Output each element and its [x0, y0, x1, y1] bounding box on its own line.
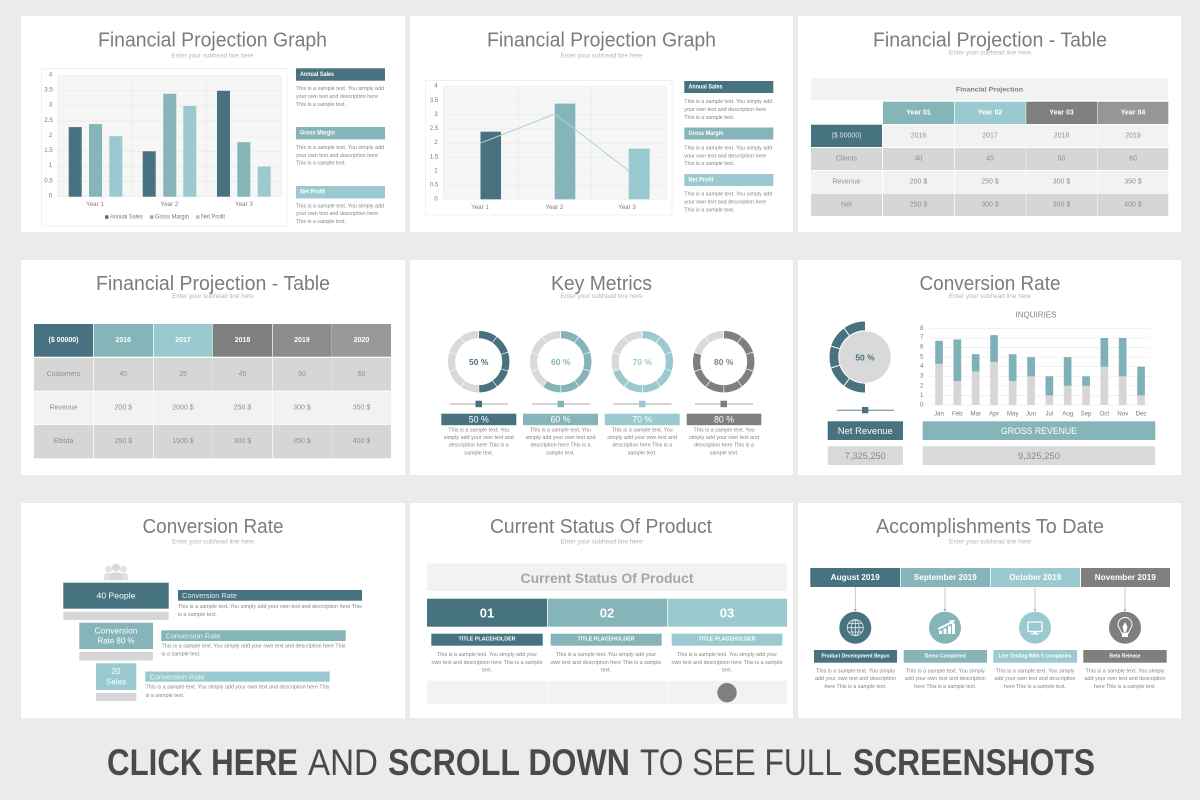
step column 03 with status marker: text. — [722, 668, 732, 674]
funnel tier: conversion rate 80 percent: Conversion — [94, 626, 138, 636]
inquiries stacked bar chart: 1 — [920, 392, 924, 399]
table: ($ 00000) — [832, 132, 861, 140]
inquiries stacked bar chart: May — [1007, 410, 1019, 418]
table: 45 — [239, 371, 246, 378]
funnel tier: 20 sales: Conversion Rate — [150, 672, 204, 682]
table: 45 — [986, 156, 994, 162]
net revenue — [828, 421, 903, 465]
call to action footer: CLICK HERE — [107, 742, 298, 783]
bar and line chart: 0 — [434, 196, 438, 202]
icon: growth chart — [938, 620, 955, 634]
table — [34, 324, 391, 458]
table: 2020 — [354, 337, 369, 344]
table: Year 01 — [906, 110, 931, 116]
net revenue: Net Revenue — [838, 426, 893, 436]
table: 350 $ — [1053, 202, 1070, 208]
title: Current Status Of Product — [490, 516, 712, 538]
step column 02: TITLE PLACEHOLDER — [578, 637, 634, 643]
sidebar notes: This is a sample text. — [684, 161, 734, 167]
funnel tier: 40 people: 40 People — [96, 591, 136, 601]
title: Key Metrics — [551, 273, 652, 295]
sidebar notes: Annual Sales — [300, 72, 335, 78]
icon: light bulb — [1118, 618, 1132, 637]
inquiries stacked bar chart: INQUIRIES — [1016, 310, 1056, 320]
sidebar notes: This is a sample text. You simply add — [296, 204, 384, 210]
table: 50 — [298, 371, 306, 378]
milestone: october 2019: add your own text and description — [994, 676, 1076, 682]
table: 2019 — [294, 337, 310, 344]
status banner — [427, 563, 787, 591]
bar and line chart: 2 — [434, 139, 438, 146]
step column 01: TITLE PLACEHOLDER — [458, 637, 516, 643]
sidebar notes: your own text and description here — [296, 211, 378, 217]
sidebar notes: This is a sample text. You simply add — [684, 99, 772, 105]
sidebar notes: Net Profit — [300, 190, 325, 196]
legend: Gross Margin — [155, 214, 190, 220]
sidebar notes: Net Profit — [688, 178, 714, 184]
subhead: Enter your subhead line here — [172, 294, 255, 300]
icon: people — [104, 564, 128, 580]
sidebar notes — [684, 81, 773, 214]
subhead: Enter your subhead line here — [560, 54, 643, 60]
bar and line chart: 1.5 — [430, 154, 439, 160]
table: Financial Projection — [956, 86, 1023, 94]
sidebar notes: your own text and description here — [684, 200, 766, 206]
step column 02: 02 — [600, 606, 614, 620]
net revenue: 7,325,250 — [845, 451, 886, 461]
funnel tier: 20 sales: 20 — [112, 667, 121, 676]
grouped bar chart: Year 3 — [235, 201, 253, 208]
bar and line chart — [426, 80, 672, 215]
icon: monitor — [1028, 622, 1042, 634]
inquiries stacked bar chart: 4 — [920, 363, 924, 370]
bar and line chart: 4 — [434, 82, 438, 90]
title: Accomplishments To Date — [876, 516, 1104, 538]
grouped bar chart: 2.5 — [44, 117, 53, 124]
inquiries stacked bar chart: Mar — [970, 410, 981, 418]
milestone: september 2019: This is a sample text. You simply — [906, 668, 985, 674]
table: 200 $ — [115, 404, 132, 412]
inquiries stacked bar chart: Jun — [1026, 410, 1037, 418]
metric: 50 percent: 50 % — [469, 357, 489, 367]
grouped bar chart: 2 — [49, 132, 53, 139]
table: 2018 — [1054, 132, 1069, 140]
grouped bar chart: 1.5 — [44, 147, 53, 154]
step column 03 with status marker: TITLE PLACEHOLDER — [698, 637, 756, 643]
title: Financial Projection Graph — [487, 30, 716, 52]
panel: financial projection table, four years — [798, 16, 1181, 232]
metric: 70 percent: simply add your own text and — [607, 435, 677, 441]
panel: current status of product — [410, 503, 793, 718]
milestone: october 2019: This is a sample text. You simply — [996, 668, 1075, 674]
metric: 60 percent: 60 % — [551, 357, 571, 367]
inquiries stacked bar chart: 0 — [920, 402, 924, 408]
table: 300 $ — [293, 404, 311, 412]
panel: financial projection table, five years — [21, 260, 405, 475]
title: Financial Projection - Table — [873, 30, 1107, 52]
milestone: october 2019: October 2019 — [1009, 573, 1062, 582]
table: 2018 — [235, 337, 250, 344]
step column 01: This is a sample text. You simply add your — [437, 652, 537, 658]
step column 01: text. — [482, 668, 492, 674]
milestone: august 2019: Product Development Begun — [822, 653, 890, 659]
milestone: october 2019 — [991, 568, 1080, 690]
table: 2019 — [1125, 132, 1141, 140]
funnel tier: 40 people: This is a sample text. You simply add your own text and description here This — [178, 604, 362, 610]
bar and line chart: Year 1 — [471, 204, 489, 211]
funnel tier: 40 people: is a sample text. — [178, 612, 217, 618]
step column 02: text. — [601, 668, 611, 674]
metric: 80 percent: simply add your own text and — [689, 435, 759, 441]
table: Revenue — [49, 404, 78, 412]
inquiries stacked bar chart: 5 — [920, 354, 924, 360]
funnel tier: 20 sales: Seles — [106, 678, 126, 686]
sidebar notes: Annual Sales — [688, 85, 723, 91]
funnel tier: conversion rate 80 percent: Conversion Rate — [166, 632, 220, 640]
metric: 60 percent: description here This is a — [530, 443, 590, 449]
sidebar notes — [296, 68, 385, 225]
subhead: Enter your subhead line here — [560, 540, 643, 546]
call to action footer: SCROLL DOWN — [388, 742, 630, 783]
metric: 80 percent: 80 % — [714, 414, 734, 424]
inquiries stacked bar chart: 3 — [920, 372, 924, 380]
panel: financial projection graph, three series — [21, 16, 405, 232]
sidebar notes: your own text and description here — [684, 107, 766, 113]
table: 300 $ — [981, 202, 999, 208]
table: 2016 — [911, 132, 926, 140]
funnel tier: conversion rate 80 percent: is a sample text. — [162, 652, 200, 658]
grouped bar chart: 1 — [49, 162, 53, 169]
call to action footer: AND — [308, 742, 378, 783]
metric: 70 percent: 70 % — [633, 357, 652, 367]
sidebar notes: This is a sample text. You simply add — [684, 192, 772, 198]
subhead: Enter your subhead line here — [560, 294, 643, 300]
table: 40 — [915, 156, 922, 162]
funnel tier: conversion rate 80 percent: This is a sample text. You simply add your own text and description here This — [162, 644, 346, 650]
sidebar notes: This is a sample text. — [684, 115, 734, 121]
table: 2016 — [116, 337, 131, 344]
sidebar notes: This is a sample text. — [684, 208, 734, 214]
inquiries stacked bar chart: 8 — [920, 325, 924, 332]
milestone: august 2019 — [810, 568, 900, 690]
bar and line chart: Year 2 — [546, 204, 564, 211]
table: Revenue — [832, 178, 861, 186]
metric: 50 percent: 50 % — [469, 414, 489, 424]
funnel tier: 40 people: Conversion Rate — [182, 591, 237, 600]
step column 01: own text and description here This is a sample — [432, 660, 542, 666]
bar and line chart: 2.5 — [430, 125, 439, 132]
metric: 70 percent: This is a sample text. You — [612, 427, 673, 433]
milestone: november 2019: November 2019 — [1095, 573, 1156, 582]
step column 02: This is a sample text. You simply add your — [556, 652, 656, 658]
sidebar notes: This is a sample text. — [296, 219, 346, 225]
inquiries stacked bar chart: 7 — [920, 334, 924, 341]
panel: key metrics — [410, 260, 793, 475]
funnel tier: conversion rate 80 percent — [79, 623, 346, 660]
table: 60 — [358, 371, 365, 378]
metric: 50 percent: description here This is a — [449, 443, 509, 449]
milestone: september 2019: here This is a sample text. — [914, 684, 976, 690]
subhead: Enter your subhead line here — [949, 540, 1032, 546]
milestone: august 2019: August 2019 — [831, 573, 880, 582]
step column 01: 01 — [480, 606, 494, 620]
title: Conversion Rate — [920, 273, 1060, 295]
milestone: october 2019: Live Testing With 5 companies — [998, 653, 1072, 659]
icon: globe — [847, 620, 863, 636]
table: Year 03 — [1049, 110, 1074, 116]
inquiries stacked bar chart: 2 — [920, 382, 924, 390]
gross revenue: 9,325,250 — [1018, 451, 1060, 461]
table: 2017 — [175, 337, 191, 344]
metric: 80 percent: sample text. — [710, 450, 738, 456]
inquiries stacked bar chart: Jan — [934, 410, 945, 418]
grouped bar chart — [42, 68, 287, 226]
panel: conversion rate funnel — [21, 503, 405, 718]
metric: 50 percent: simply add your own text and — [444, 435, 514, 441]
milestone: november 2019: add your own text and description — [1084, 676, 1166, 682]
metric: 60 percent: This is a sample text. You — [530, 427, 591, 433]
title: Conversion Rate — [142, 516, 284, 538]
inquiries stacked bar chart: Nov — [1117, 410, 1129, 418]
metric: 70 percent: 70 % — [632, 414, 652, 424]
grouped bar chart: 3 — [49, 102, 53, 108]
step column 03 with status marker: This is a sample text. You simply add your — [677, 652, 777, 658]
sidebar notes: This is a sample text. You simply add — [296, 145, 384, 151]
table: 1500 $ — [172, 438, 194, 445]
slider — [837, 407, 894, 413]
step column 03 with status marker: own text and description here This is a sample — [672, 660, 782, 666]
panel: accomplishments to date — [798, 503, 1181, 718]
grouped bar chart: 0 — [49, 192, 53, 200]
table: ($ 00000) — [49, 337, 78, 344]
funnel tier: conversion rate 80 percent: Rate 80 % — [98, 636, 134, 646]
inquiries stacked bar chart: Feb — [952, 410, 963, 418]
sidebar notes: This is a sample text. — [296, 160, 346, 166]
table: 250 $ — [115, 438, 132, 445]
milestone: september 2019: add your own text and description — [905, 676, 986, 682]
table: 50 — [1058, 156, 1065, 162]
table: 200 $ — [910, 178, 927, 186]
subhead: Enter your subhead line here — [949, 294, 1032, 300]
gross revenue — [923, 421, 1155, 465]
table: 300 $ — [1053, 178, 1070, 186]
subhead: Enter your subhead line here — [172, 54, 254, 60]
legend: Net Profit — [201, 214, 225, 220]
metric: 80 percent — [687, 335, 761, 456]
bar and line chart: 0.5 — [430, 182, 439, 188]
metric: 70 percent: description here This is a — [612, 443, 672, 449]
inquiries stacked bar chart — [920, 310, 1150, 418]
panel: conversion rate with inquiries chart — [798, 260, 1181, 475]
metric: 70 percent — [605, 335, 680, 456]
table: 25 — [179, 371, 187, 378]
call to action footer: SCREENSHOTS — [853, 742, 1095, 783]
table: 350 $ — [293, 438, 311, 445]
step column 02 — [548, 599, 667, 704]
half donut gauge: 50 % — [855, 352, 875, 362]
grouped bar chart: 3.5 — [44, 86, 53, 94]
gross revenue: GROSS REVENUE — [1001, 426, 1077, 436]
inquiries stacked bar chart: 6 — [920, 344, 924, 350]
sidebar notes: your own text and description here — [296, 94, 378, 100]
table: Year 04 — [1121, 110, 1145, 116]
table: Net — [841, 202, 852, 208]
inquiries stacked bar chart: Apr — [989, 410, 999, 418]
subhead: Enter your subhead line here — [172, 540, 255, 546]
grouped bar chart: 0.5 — [44, 178, 53, 184]
table: Clients — [836, 156, 858, 162]
sidebar notes: your own text and description here — [684, 154, 766, 160]
bar and line chart: 1 — [434, 168, 438, 174]
bar and line chart: 3 — [434, 111, 438, 118]
table — [811, 78, 1168, 216]
metric: 60 percent: simply add your own text and — [526, 435, 596, 441]
metric: 80 percent: This is a sample text. You — [694, 427, 754, 433]
milestone: september 2019: Demo Completed — [925, 653, 966, 659]
funnel tier: 20 sales: is a sample text. — [146, 693, 184, 699]
bar and line chart: Year 3 — [618, 204, 636, 211]
table: 40 — [119, 371, 127, 378]
metric: 70 percent: sample text. — [628, 450, 657, 456]
step column 01 — [427, 599, 547, 704]
step column 03 with status marker: 03 — [720, 606, 734, 620]
call to action footer: TO SEE FULL — [640, 742, 842, 783]
milestone: september 2019: September 2019 — [914, 573, 977, 582]
milestone: august 2019: This is a sample text. You simply — [816, 668, 895, 674]
subhead: Enter your subhead line here — [949, 50, 1032, 56]
table: 2000 $ — [172, 404, 194, 412]
milestone: september 2019 — [901, 568, 990, 690]
sidebar notes: Gross Margin — [688, 131, 724, 137]
table: 250 $ — [981, 178, 999, 186]
funnel tier: 40 people — [63, 583, 362, 620]
half donut gauge — [830, 326, 892, 388]
sidebar notes: This is a sample text. You simply add — [296, 86, 384, 92]
inquiries stacked bar chart: Sep — [1080, 410, 1092, 418]
table: 300 $ — [234, 438, 251, 445]
milestone: november 2019: here This is a sample text. — [1094, 684, 1156, 690]
inquiries stacked bar chart: Jul — [1045, 410, 1053, 418]
grouped bar chart: 4 — [49, 72, 53, 78]
table: 250 $ — [234, 404, 251, 412]
step column 02: own text and description here This is a sample — [550, 660, 662, 666]
title: Financial Projection Graph — [98, 30, 327, 52]
table: 350 $ — [353, 404, 370, 412]
panel: financial projection graph, bars and line — [410, 16, 793, 232]
metric: 60 percent: 60 % — [550, 414, 570, 424]
bar and line chart: 3.5 — [430, 97, 439, 104]
table: 60 — [1129, 156, 1137, 162]
title: Financial Projection - Table — [96, 273, 330, 295]
inquiries stacked bar chart: Aug — [1062, 410, 1074, 418]
sidebar notes: Gross Margin — [300, 131, 335, 137]
table: 400 $ — [353, 438, 370, 445]
table: 400 $ — [1124, 202, 1142, 208]
funnel tier: 20 sales — [96, 663, 330, 701]
sidebar notes: This is a sample text. You simply add — [684, 146, 772, 152]
status banner: Current Status Of Product — [520, 570, 694, 586]
milestone: october 2019: here This is a sample text. — [1004, 684, 1066, 690]
step column 03 with status marker — [668, 599, 787, 704]
metric: 50 percent: This is a sample text. You — [448, 427, 509, 433]
milestone: november 2019: This is a sample text. You simply — [1086, 668, 1165, 674]
legend: Annual Sales — [110, 214, 143, 220]
metric: 60 percent: sample text. — [546, 450, 575, 456]
grouped bar chart: Year 2 — [161, 201, 179, 208]
call to action footer — [107, 742, 1095, 783]
table: Year 02 — [978, 110, 1002, 116]
milestone: august 2019: add your own text and description — [815, 676, 896, 682]
table: Ebitda — [54, 438, 74, 445]
metric: 50 percent: sample text. — [464, 450, 493, 456]
grouped bar chart: Year 1 — [86, 201, 104, 208]
table: 250 $ — [910, 202, 927, 208]
table: 350 $ — [1124, 178, 1142, 186]
milestone: august 2019: here This is a sample text. — [824, 684, 886, 690]
milestone: november 2019: Beta Release — [1110, 653, 1140, 659]
funnel tier: 20 sales: This is a sample text. You simply add your own text and description here This — [146, 684, 330, 690]
metric: 50 percent — [441, 335, 516, 456]
inquiries stacked bar chart: Oct — [1099, 410, 1109, 418]
sidebar notes: This is a sample text. — [296, 102, 346, 108]
legend — [105, 214, 225, 220]
sidebar notes: your own text and description here — [296, 153, 378, 159]
metric: 80 percent: 80 % — [714, 357, 734, 367]
table: Customers — [47, 371, 81, 378]
metric: 60 percent — [523, 335, 598, 456]
table: 2017 — [982, 132, 998, 140]
metric: 80 percent: description here This is a — [694, 443, 754, 449]
inquiries stacked bar chart: Dec — [1135, 410, 1147, 418]
milestone: november 2019 — [1081, 568, 1170, 690]
